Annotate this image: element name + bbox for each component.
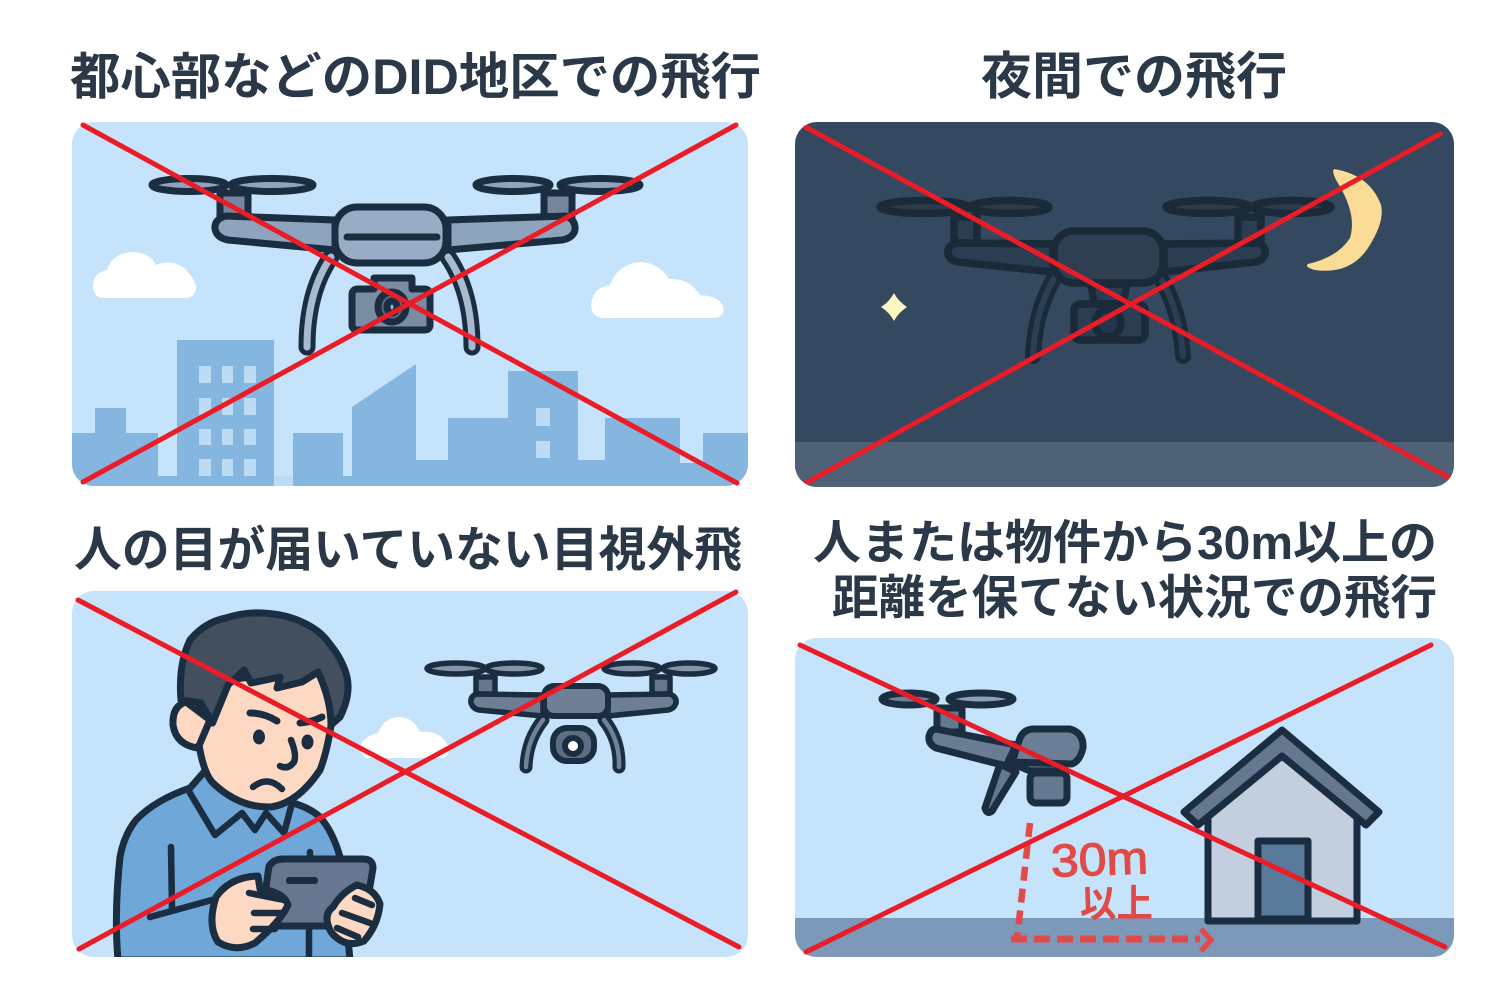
heading: beyond visual line of sight: 人の目が届いていない目視外飛 — [74, 524, 742, 577]
tilted drone — [882, 693, 1083, 812]
panel: person beyond line of sight — [72, 591, 748, 960]
sky background — [72, 122, 748, 486]
camera — [352, 278, 430, 330]
star — [881, 293, 907, 321]
red cross — [78, 592, 739, 949]
red cross — [802, 125, 1448, 483]
landing legs — [307, 257, 472, 347]
hair — [180, 613, 348, 725]
dark drone — [880, 200, 1331, 356]
house — [1184, 730, 1379, 921]
moon — [1307, 169, 1382, 271]
propellers — [152, 178, 640, 192]
distance label: 以上 — [1080, 884, 1153, 926]
sky — [72, 591, 748, 957]
drone — [152, 178, 640, 347]
city skyline — [72, 340, 748, 486]
heading: DID district: 都心部などのDID地区での飛行 — [70, 49, 761, 105]
panel: 30m distance — [795, 638, 1454, 957]
heading: 30m distance: 人または物件から30m以上の — [813, 516, 1437, 569]
distance arrow — [1011, 823, 1211, 951]
shirt — [116, 772, 350, 960]
red cross — [83, 125, 737, 483]
arms — [215, 216, 575, 250]
panel: night — [795, 122, 1454, 487]
heading: 30m distance — [813, 516, 1437, 624]
rotor posts — [220, 193, 572, 217]
drone — [427, 663, 715, 767]
hands — [212, 876, 288, 948]
ground — [795, 918, 1454, 957]
distance label: 30m — [1050, 831, 1149, 887]
cloud — [361, 717, 449, 758]
panel: city — [72, 122, 748, 486]
ear — [173, 702, 210, 748]
ground — [795, 442, 1454, 487]
controller — [262, 852, 373, 926]
heading: 30m distance: 距離を保てない状況での飛行 — [832, 571, 1437, 624]
red cross — [800, 645, 1445, 952]
person — [116, 613, 380, 960]
collar — [190, 793, 291, 835]
distance label — [1052, 842, 1152, 920]
sky — [795, 638, 1454, 957]
body — [335, 207, 446, 263]
night sky — [795, 122, 1454, 487]
heading: night flight: 夜間での飛行 — [981, 48, 1287, 105]
facial features — [250, 713, 322, 789]
clouds — [93, 252, 724, 318]
face — [196, 668, 333, 807]
